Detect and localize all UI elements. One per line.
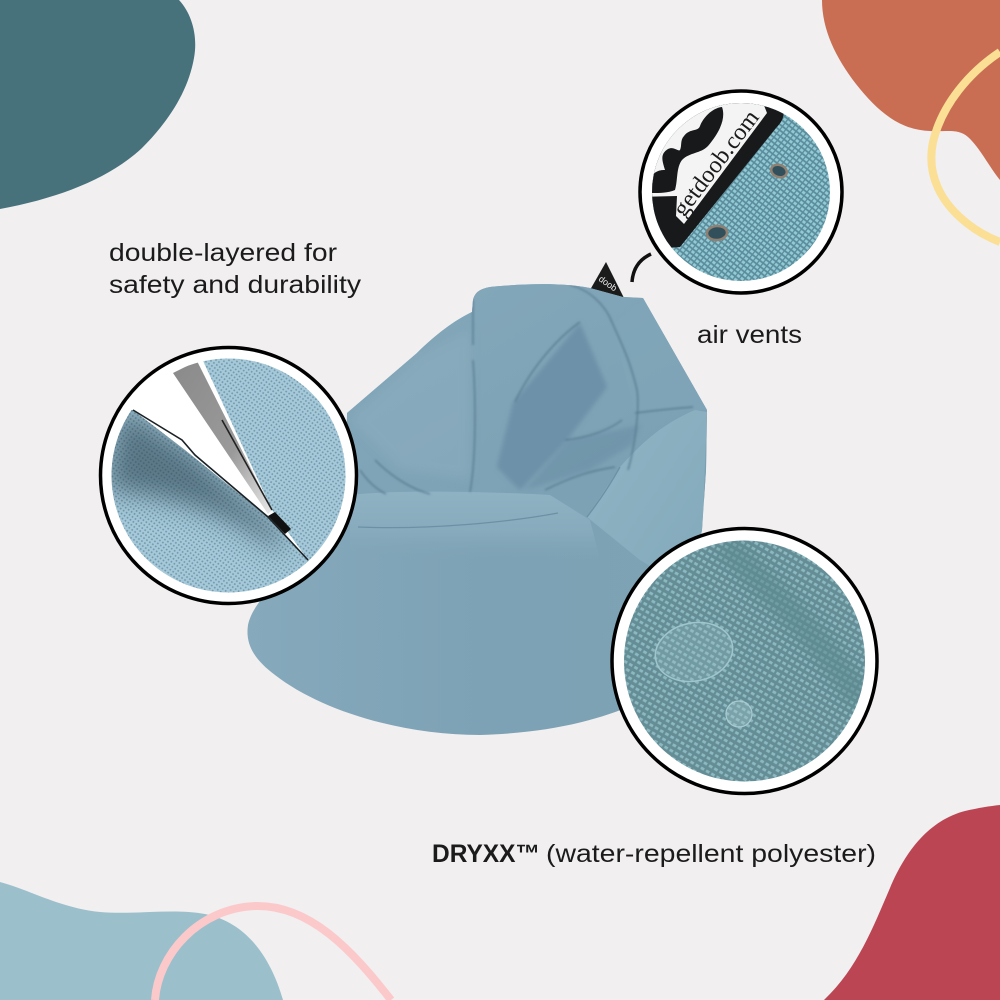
zip line (133, 410, 308, 560)
upper fabric (203, 358, 346, 584)
decorative ring: yellow top right (931, 52, 1000, 242)
eyelet upper (770, 164, 788, 178)
crease lines (360, 285, 693, 494)
large droplet (654, 622, 734, 682)
decorative blob: red bottom right (824, 805, 1000, 1000)
lower fold (532, 428, 634, 486)
lower fabric (112, 410, 308, 592)
decorative blob: light blue bottom left (0, 882, 283, 1000)
callout: air vents (640, 90, 850, 300)
heading: double-layered label: double-layered for (109, 239, 337, 267)
seat (352, 492, 594, 536)
decorative blob: teal top left (0, 0, 195, 209)
chair body (240, 280, 720, 740)
connector arc to air vents (632, 254, 651, 282)
heading: DRYXX label (432, 840, 876, 868)
seat seam (358, 513, 558, 528)
arm seam (587, 467, 620, 517)
printed URL: getdoob.com (668, 105, 765, 222)
small droplet (726, 701, 752, 727)
heading: double-layered label (109, 239, 362, 299)
beanbag chair (240, 262, 720, 740)
heading: air vents label: air vents (697, 321, 802, 349)
tag: doob (597, 274, 619, 293)
heading: DRYXX label: DRYXX™ (432, 840, 540, 868)
decorative ring: pink bottom left (155, 906, 391, 1000)
tag (590, 262, 625, 300)
fabric (652, 103, 830, 281)
right panel (644, 299, 702, 401)
logo letters (650, 107, 723, 193)
fabric (624, 540, 865, 782)
eyelet lower (706, 225, 728, 241)
zip pull (268, 512, 291, 534)
black label (652, 103, 784, 248)
grey inner flap (173, 361, 272, 514)
heading: DRYXX label: (water-repellent polyester) (546, 840, 876, 868)
decorative blob: orange top right (822, 0, 1000, 180)
lower fabric shade (105, 405, 285, 555)
dark fold (497, 323, 607, 490)
flap edge (222, 420, 272, 510)
back panel (340, 280, 710, 500)
base (240, 280, 720, 740)
callout: water-repellent fabric (612, 528, 877, 794)
fold shading (725, 545, 860, 700)
white label (652, 103, 767, 224)
heading: double-layered label: safety and durability (109, 271, 362, 299)
left back highlight (350, 330, 470, 480)
right arm (588, 410, 707, 566)
callout: zipper (100, 348, 356, 604)
